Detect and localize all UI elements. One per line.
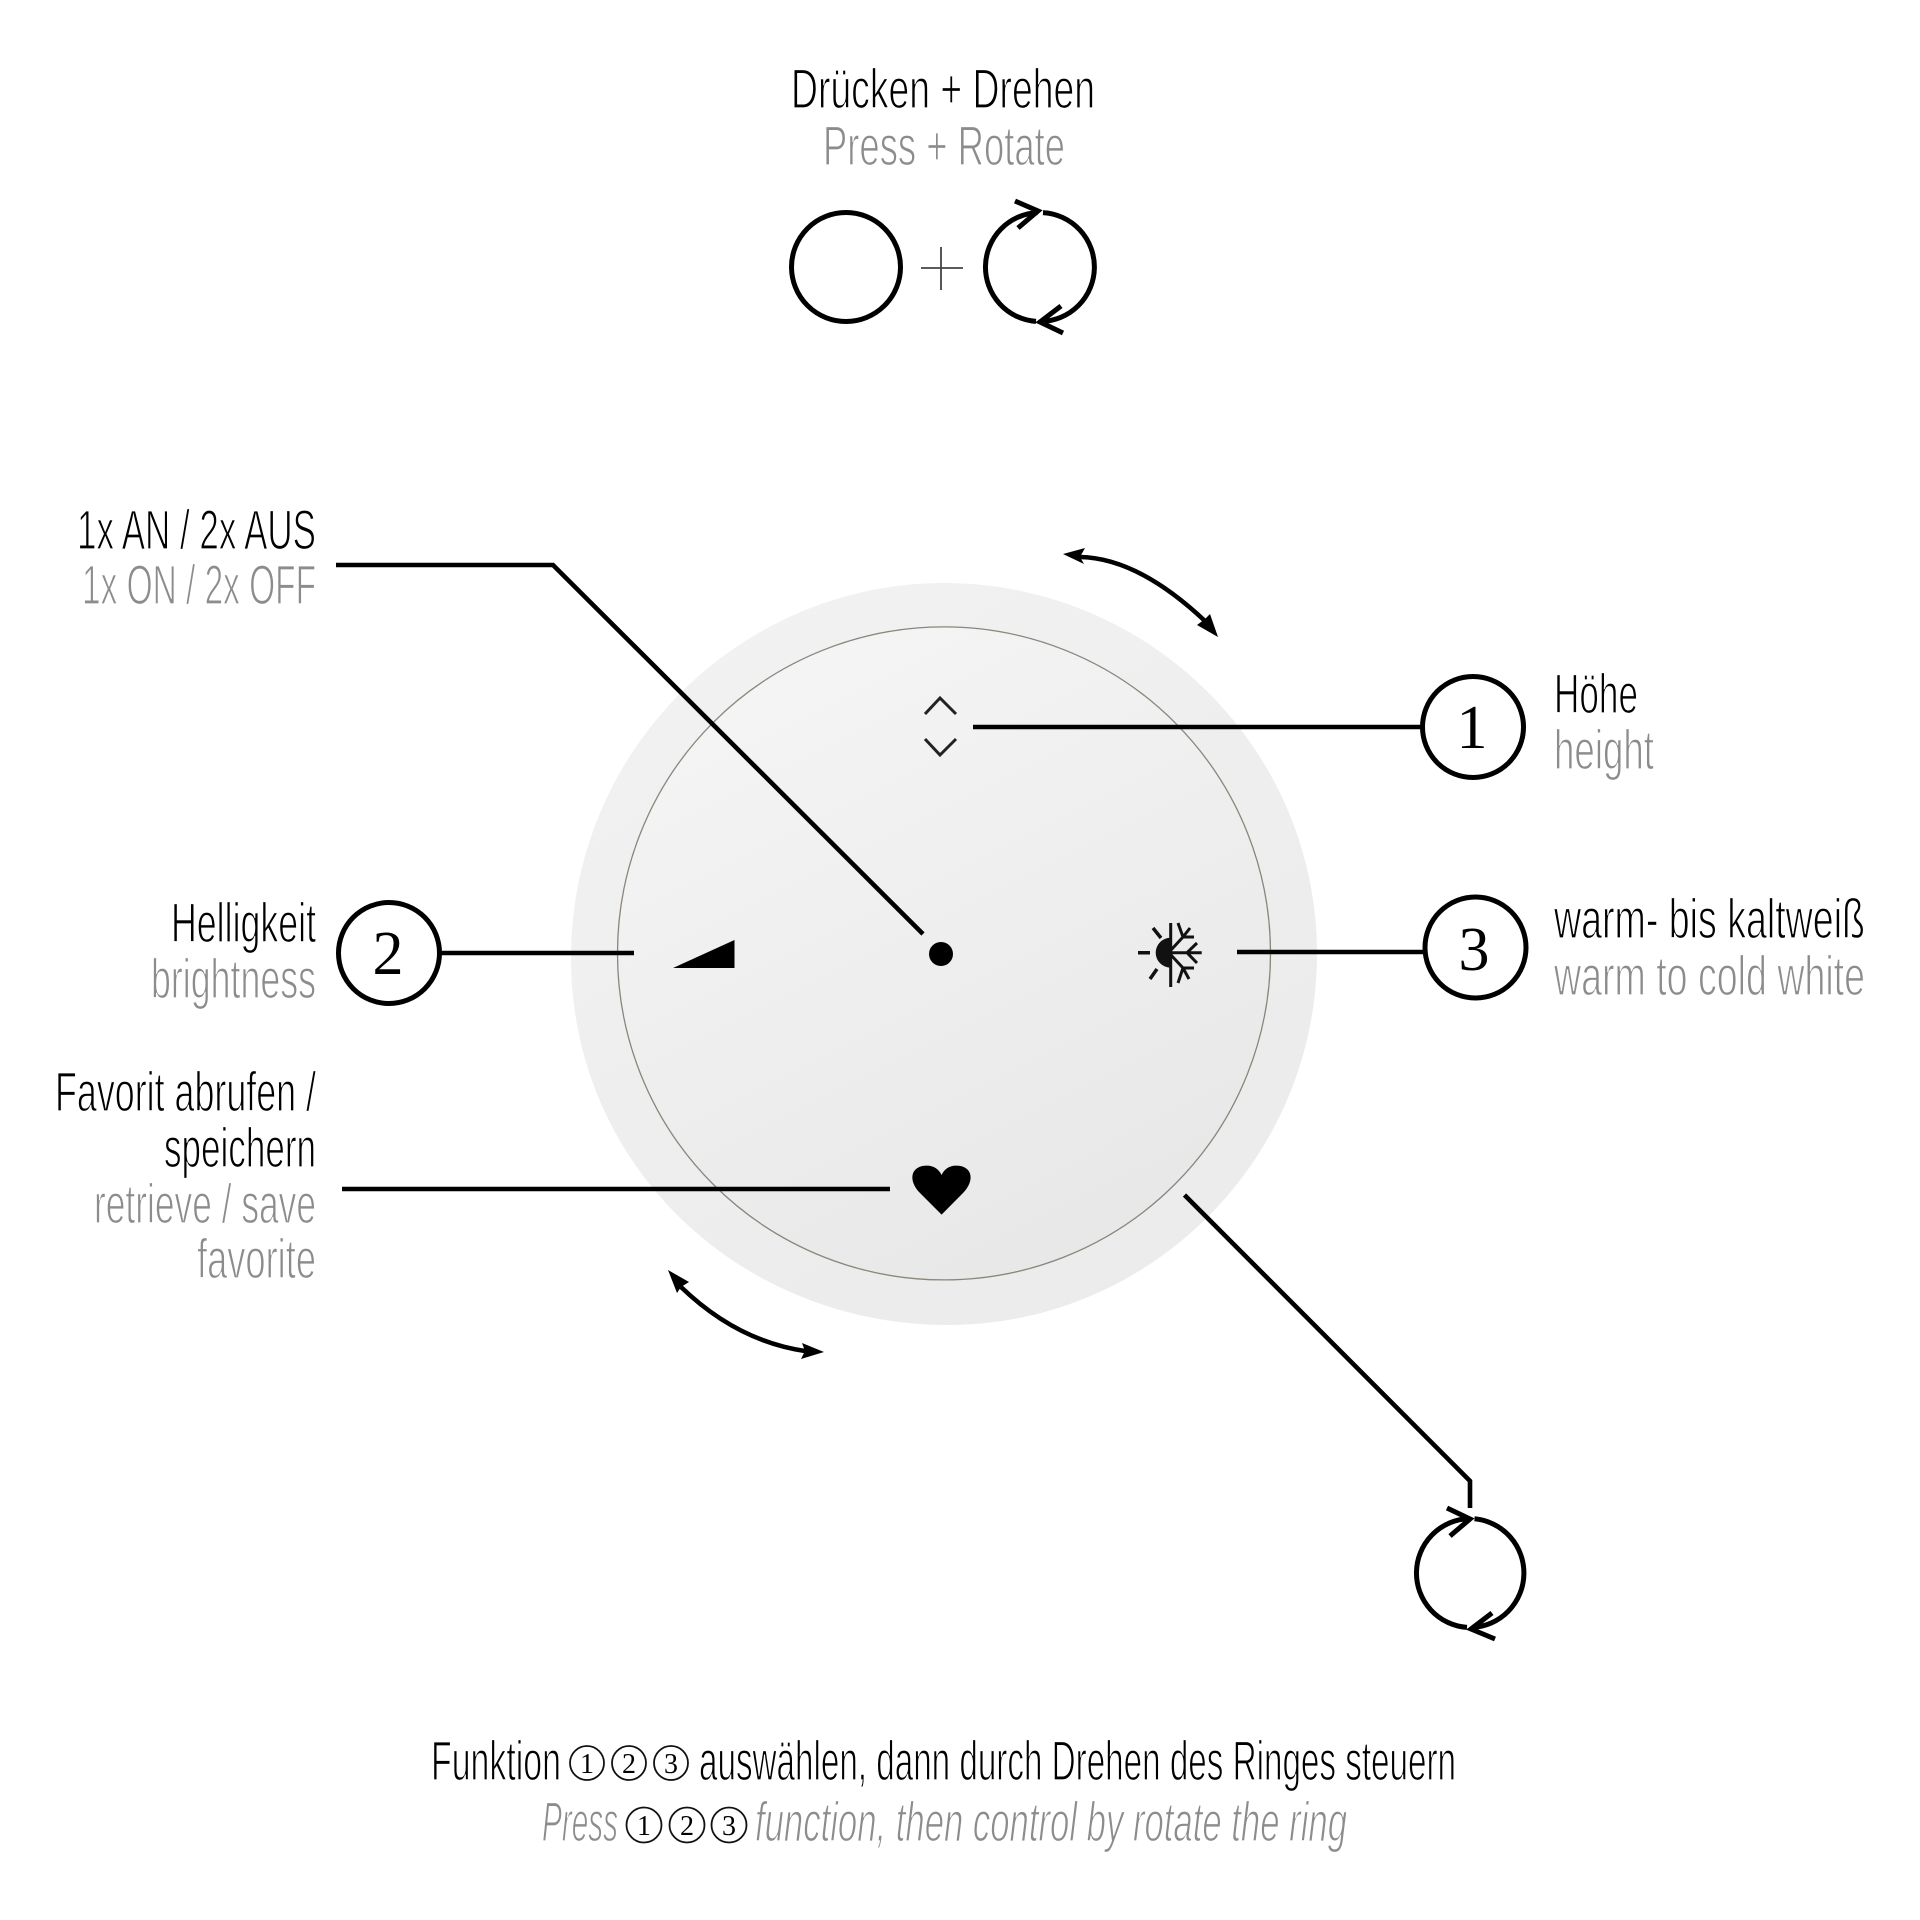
rotation arrow: upper right: [1063, 548, 1218, 637]
label: brightness: brightness: [151, 947, 316, 1010]
label: on/off: 1x AN / 2x AUS: [77, 498, 316, 561]
icon: press circle: [792, 212, 900, 322]
number badge 2: [338, 902, 440, 1004]
label: height: height: [1554, 718, 1654, 781]
leader line: on/off to center: [336, 565, 923, 934]
heading: Drücken + Drehen: [791, 57, 1095, 177]
number badge 2: 2: [372, 920, 404, 988]
heading: Drücken + Drehen: Drücken + Drehen: [791, 57, 1095, 120]
footer: German instruction: 1: [580, 1749, 594, 1780]
label: favorite: Favorit abrufen /: [55, 1060, 316, 1123]
number badge 1: 1: [1456, 694, 1488, 762]
footer: English instruction: Press: [542, 1790, 618, 1853]
leader line: height: [973, 725, 1421, 729]
leader line: favorite: [342, 1187, 890, 1191]
panel: rotary control disc: [571, 583, 1317, 1325]
footer: German instruction: 2: [622, 1749, 636, 1780]
icon: warm to cold sun and snowflake: [1138, 923, 1202, 987]
leader line: brightness: [441, 951, 634, 955]
icon: heart: [912, 1166, 971, 1215]
icon: ring rotate arrows: [1416, 1508, 1524, 1639]
label: on/off: [77, 498, 316, 616]
footer: English instruction: 2: [680, 1811, 694, 1842]
label: favorite: [55, 1060, 316, 1290]
label: color temperature: [1553, 887, 1865, 1007]
footer: German instruction: Funktion: [431, 1729, 561, 1792]
number badge 3: [1425, 897, 1526, 998]
label: brightness: [151, 891, 316, 1010]
label: favorite: favorite: [197, 1227, 316, 1290]
footer: English instruction: function, then control by rotate the ring: [755, 1790, 1347, 1853]
footer: German instruction: [431, 1729, 1456, 1792]
icon: rotate arrows: [985, 201, 1094, 333]
icon: brightness wedge: [673, 940, 734, 968]
label: height: Höhe: [1554, 662, 1638, 725]
footer: German instruction: 3: [664, 1749, 678, 1780]
label: brightness: Helligkeit: [171, 891, 316, 954]
label: height: [1554, 662, 1654, 781]
number badge 1: [1422, 676, 1524, 778]
footer: English instruction: 1: [637, 1811, 651, 1842]
label: on/off: 1x ON / 2x OFF: [82, 553, 316, 616]
heading: Drücken + Drehen: Press + Rotate: [823, 114, 1065, 177]
number badge 3: 3: [1458, 916, 1490, 984]
inner button face: [618, 627, 1270, 1280]
icon: height chevrons: [925, 698, 956, 755]
leader line: ring to rotate icon: [1184, 1195, 1470, 1508]
leader line: color temperature: [1237, 950, 1424, 954]
icon: center dot: [929, 942, 953, 966]
icon: plus sign: [921, 247, 963, 290]
rotation arrow: lower left: [668, 1270, 824, 1359]
label: favorite: speichern: [164, 1116, 316, 1179]
footer: English instruction: 3: [722, 1811, 736, 1842]
outer ring: [571, 583, 1317, 1325]
label: favorite: retrieve / save: [94, 1172, 316, 1235]
footer: English instruction: [542, 1790, 1347, 1853]
